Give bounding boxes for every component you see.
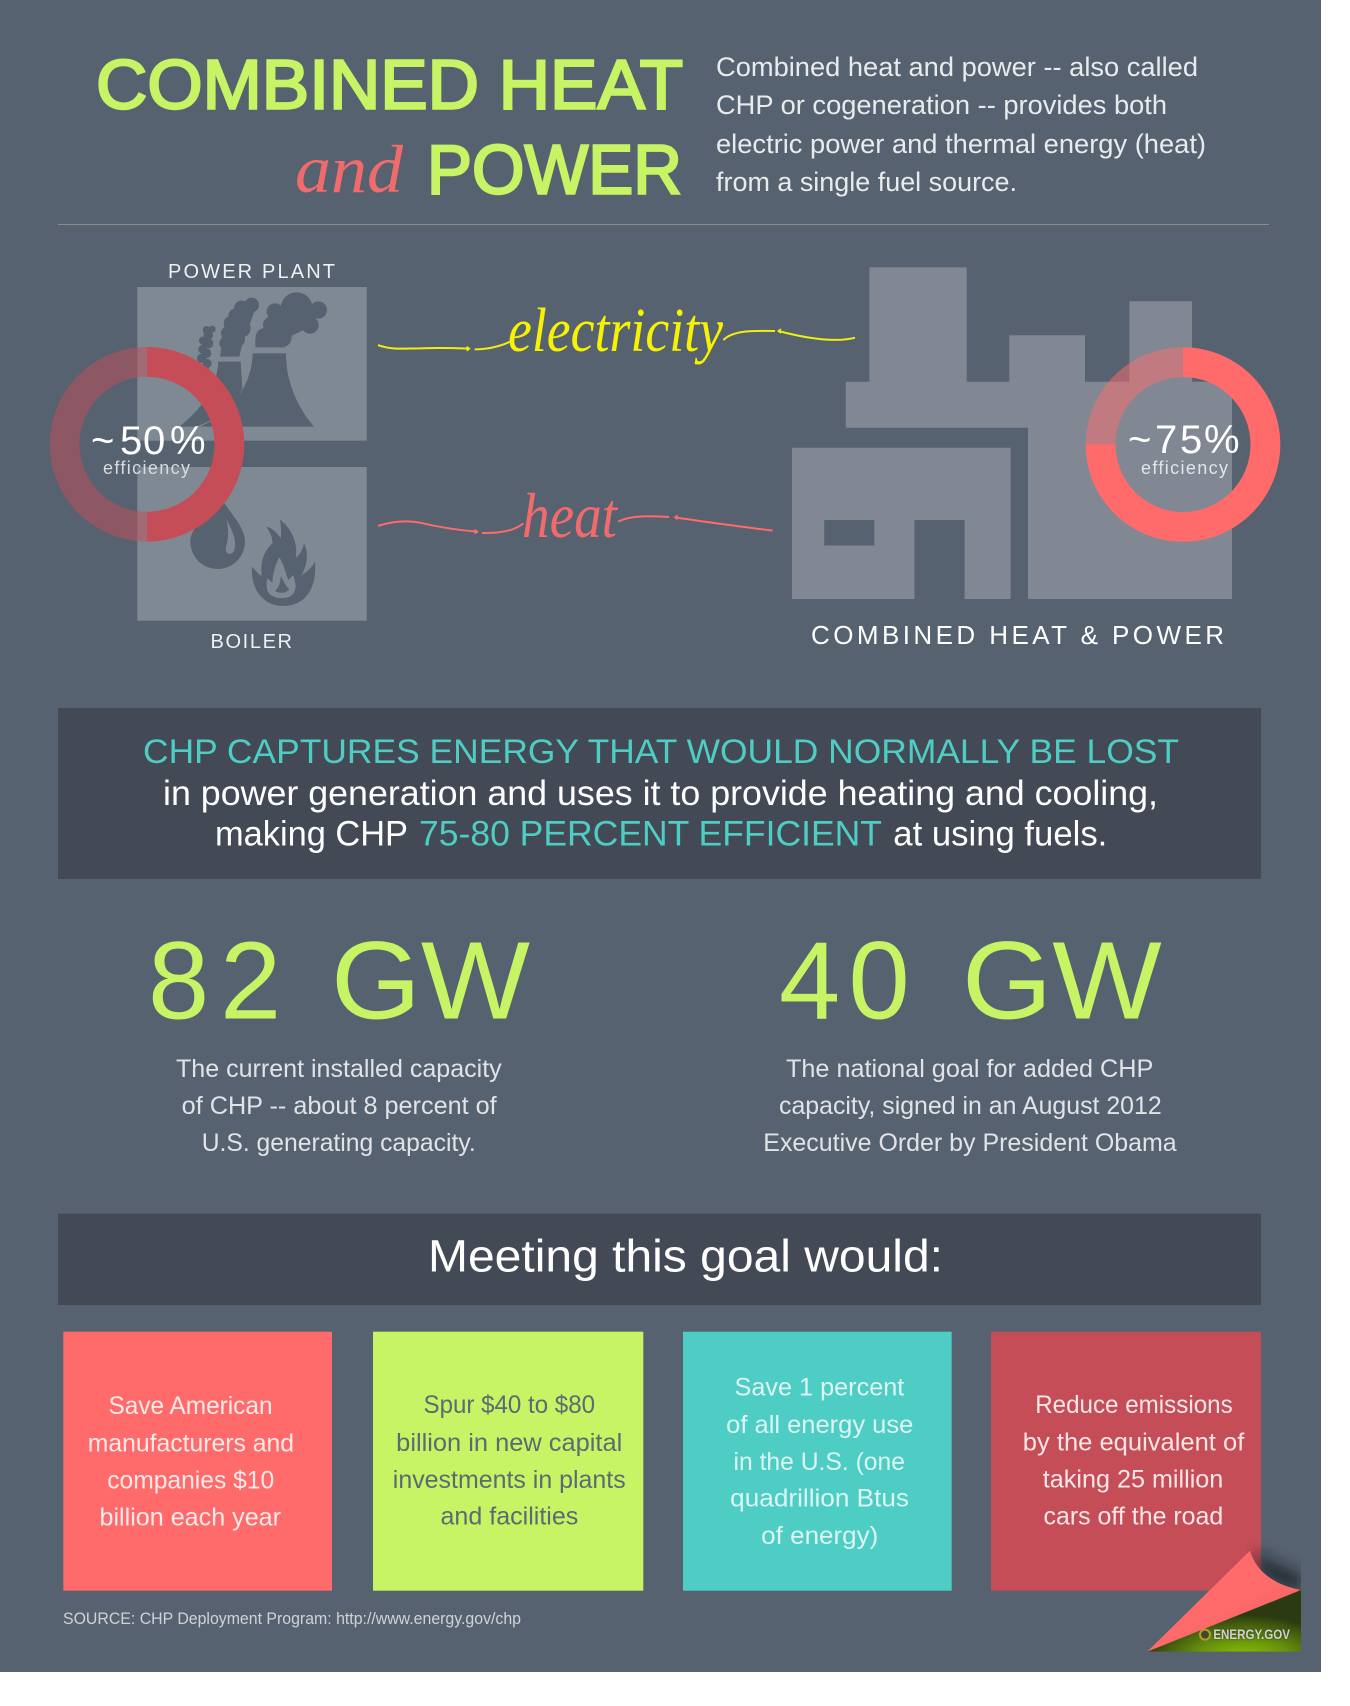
caption: efficiency: efficiency bbox=[1141, 458, 1228, 478]
label: combined heat and power: COMBINED HEAT & POWER bbox=[811, 620, 1224, 650]
intro paragraph: CHP or cogeneration -- provides both bbox=[716, 90, 1167, 120]
stat description: 40 GW: capacity, signed in an August 2012 bbox=[779, 1092, 1162, 1120]
intro paragraph: Combined heat and power -- also called bbox=[716, 52, 1198, 82]
intro paragraph: from a single fuel source. bbox=[716, 167, 1017, 197]
banner line 1: CHP CAPTURES ENERGY THAT WOULD NORMALLY BE LOST bbox=[143, 733, 1179, 771]
title: POWER bbox=[427, 130, 682, 208]
card: spur capital investments: investments in plants bbox=[393, 1466, 626, 1494]
caption: efficiency: efficiency bbox=[103, 458, 190, 478]
banner line 3: 75-80 PERCENT EFFICIENT bbox=[419, 814, 882, 854]
banner line 3: at using fuels. bbox=[893, 814, 1107, 854]
card: reduce emissions: Reduce emissions bbox=[1035, 1391, 1233, 1419]
stat: 40 GW bbox=[779, 919, 1162, 1042]
card: save energy: quadrillion Btus bbox=[730, 1485, 909, 1513]
value: ~50%: ~50% bbox=[91, 419, 206, 463]
stat: 82 GW: GW bbox=[331, 919, 530, 1042]
icon: fuel drop bbox=[190, 497, 245, 569]
page curl with energy.gov badge bbox=[1147, 1551, 1301, 1652]
label: power plant: POWER PLANT bbox=[168, 261, 335, 283]
card: reduce emissions: by the equivalent of bbox=[1023, 1429, 1244, 1457]
stat: 40 GW: 40 bbox=[779, 919, 910, 1042]
stat description: 82 GW: of CHP -- about 8 percent of bbox=[182, 1092, 497, 1120]
donut chart: 75% efficiency bbox=[1086, 347, 1280, 542]
logo text: ENERGY.GOV bbox=[1213, 1627, 1291, 1642]
icon: combined heat and power factory bbox=[792, 267, 1232, 599]
donut chart: 50% efficiency bbox=[50, 347, 244, 542]
intro paragraph bbox=[716, 52, 1206, 197]
card: reduce emissions: taking 25 million bbox=[1043, 1466, 1223, 1494]
stat description: 40 GW: The national goal for added CHP bbox=[786, 1055, 1153, 1083]
arrow: electricity left bbox=[378, 342, 510, 351]
icon: cooling towers bbox=[179, 292, 327, 427]
card: reduce emissions: cars off the road bbox=[1044, 1503, 1223, 1531]
seal bbox=[1200, 1630, 1210, 1640]
intro paragraph: electric power and thermal energy (heat) bbox=[716, 129, 1206, 159]
card: save energy bbox=[683, 1332, 952, 1591]
source note: SOURCE: CHP Deployment Program: http://www.energy.gov/chp bbox=[63, 1609, 521, 1628]
stat: 40 GW: GW bbox=[962, 919, 1162, 1042]
card: save manufacturers money bbox=[63, 1332, 332, 1591]
panel: power plant bbox=[137, 287, 367, 441]
banner heading: Meeting this goal would: bbox=[428, 1231, 943, 1282]
banner line 3: making CHP bbox=[215, 814, 408, 854]
card: spur capital investments: and facilities bbox=[440, 1502, 578, 1530]
stat description: 40 GW: Executive Order by President Obama bbox=[763, 1129, 1177, 1157]
stat description: 82 GW: U.S. generating capacity. bbox=[202, 1129, 476, 1157]
card: spur capital investments: billion in new capital bbox=[396, 1429, 622, 1457]
title: COMBINED HEAT bbox=[96, 46, 683, 124]
stat description: 40 GW bbox=[763, 1055, 1177, 1157]
card: save energy: Save 1 percent bbox=[734, 1374, 904, 1402]
card: save energy: of all energy use bbox=[726, 1411, 913, 1439]
card: spur capital investments bbox=[373, 1332, 643, 1591]
title script word: and: and bbox=[295, 131, 404, 207]
banner line 3 bbox=[215, 814, 1107, 854]
card: save manufacturers money: manufacturers and bbox=[88, 1430, 294, 1458]
script word: electricity: electricity bbox=[508, 297, 723, 365]
arrow: electricity right bbox=[723, 329, 855, 340]
script word: heat: heat bbox=[522, 480, 619, 551]
value: ~75%: ~75% bbox=[1128, 418, 1240, 462]
card: save energy: in the U.S. (one bbox=[734, 1448, 905, 1476]
icon: flame bbox=[252, 519, 315, 606]
stat description: 82 GW: The current installed capacity bbox=[176, 1055, 502, 1083]
card: save manufacturers money: companies $10 bbox=[107, 1467, 274, 1495]
banner: CHP captures energy bbox=[58, 708, 1261, 879]
stat description: 82 GW bbox=[176, 1055, 502, 1157]
stat: 82 GW bbox=[148, 919, 530, 1042]
card: save manufacturers money: billion each year bbox=[100, 1504, 281, 1532]
panel: boiler bbox=[137, 467, 367, 621]
label: boiler: BOILER bbox=[210, 631, 292, 653]
card: spur capital investments: Spur $40 to $80 bbox=[424, 1391, 595, 1419]
card: save energy: of energy) bbox=[761, 1522, 878, 1550]
arrow: heat right bbox=[618, 515, 773, 531]
banner: meeting this goal bbox=[58, 1214, 1261, 1305]
title bbox=[96, 46, 683, 208]
card: save manufacturers money: Save American bbox=[108, 1392, 272, 1420]
banner line 2: in power generation and uses it to provide heating and cooling, bbox=[163, 774, 1158, 813]
card: reduce emissions bbox=[991, 1332, 1261, 1591]
arrow: heat left bbox=[378, 521, 523, 534]
stat: 82 GW: 82 bbox=[148, 919, 281, 1042]
